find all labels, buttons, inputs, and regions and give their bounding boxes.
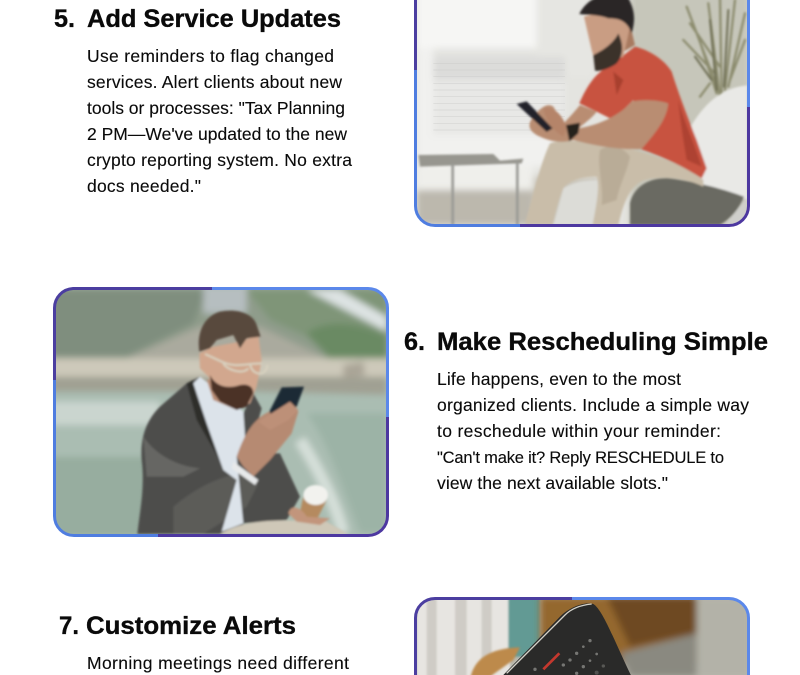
table — [418, 154, 523, 167]
photo: man with glasses holding phone and coffee by a fountain — [50, 287, 390, 542]
shirt — [579, 47, 707, 178]
trousers — [525, 141, 703, 225]
text block: step 6 body: Life happens, even to the most — [437, 369, 681, 389]
wooden stand — [471, 647, 520, 675]
text block: step 5 body: 2 PM—We've updated to the new — [87, 124, 347, 144]
text block: step 7 body: Morning meetings need different — [87, 653, 349, 673]
text block: step 6 body — [437, 369, 749, 493]
hair — [199, 311, 261, 352]
trousers — [220, 521, 348, 534]
forearm and hand — [237, 402, 298, 477]
text block: step 6 body: organized clients. Include a simple way — [437, 395, 749, 415]
phone body — [502, 603, 632, 675]
photo: smartphone calendar on a wooden stand — [413, 597, 750, 675]
photo: man in red polo using phone by a window — [413, 0, 750, 230]
text block: step 5 body: docs needed." — [87, 176, 201, 196]
panel: step 5 text — [54, 5, 352, 196]
phone — [268, 385, 305, 414]
heading: step 5: Add Service Updates — [87, 5, 341, 33]
beard — [210, 375, 253, 410]
heading: step 5: 5. — [54, 5, 75, 33]
text block: step 5 body — [87, 46, 352, 196]
jacket — [137, 377, 300, 534]
heading: step 7: 7. — [59, 612, 79, 640]
cup and hand — [300, 498, 327, 519]
panel: step 6 text — [404, 328, 768, 493]
panel: step 7 text — [59, 612, 349, 673]
glasses — [205, 354, 267, 374]
heading: step 6: Make Rescheduling Simple — [437, 328, 768, 356]
text block: step 5 body: services. Alert clients about new — [87, 72, 342, 92]
text block: step 5 body: tools or processes: "Tax Planning — [87, 98, 345, 118]
neck and face — [624, 28, 636, 52]
phone — [517, 101, 553, 132]
text block: step 6 body: "Can't make it? Reply RESCHEDULE to — [437, 449, 724, 467]
hair — [579, 0, 634, 33]
text block: step 5 body: crypto reporting system. No extra — [87, 150, 352, 170]
screen marks — [533, 639, 605, 675]
arms and hand — [529, 100, 668, 149]
heading: step 6: 6. — [404, 328, 425, 356]
text block: step 6 body: to reschedule within your reminder: — [437, 421, 721, 441]
text block: step 5 body: Use reminders to flag changed — [87, 46, 334, 66]
shirt — [193, 377, 245, 532]
text block: step 6 body: view the next available slots." — [437, 473, 668, 493]
heading: step 7: Customize Alerts — [86, 612, 296, 640]
watch — [566, 123, 580, 141]
neck and face — [207, 379, 234, 408]
plant — [683, 0, 745, 98]
beard — [593, 33, 622, 71]
chair — [692, 85, 747, 200]
